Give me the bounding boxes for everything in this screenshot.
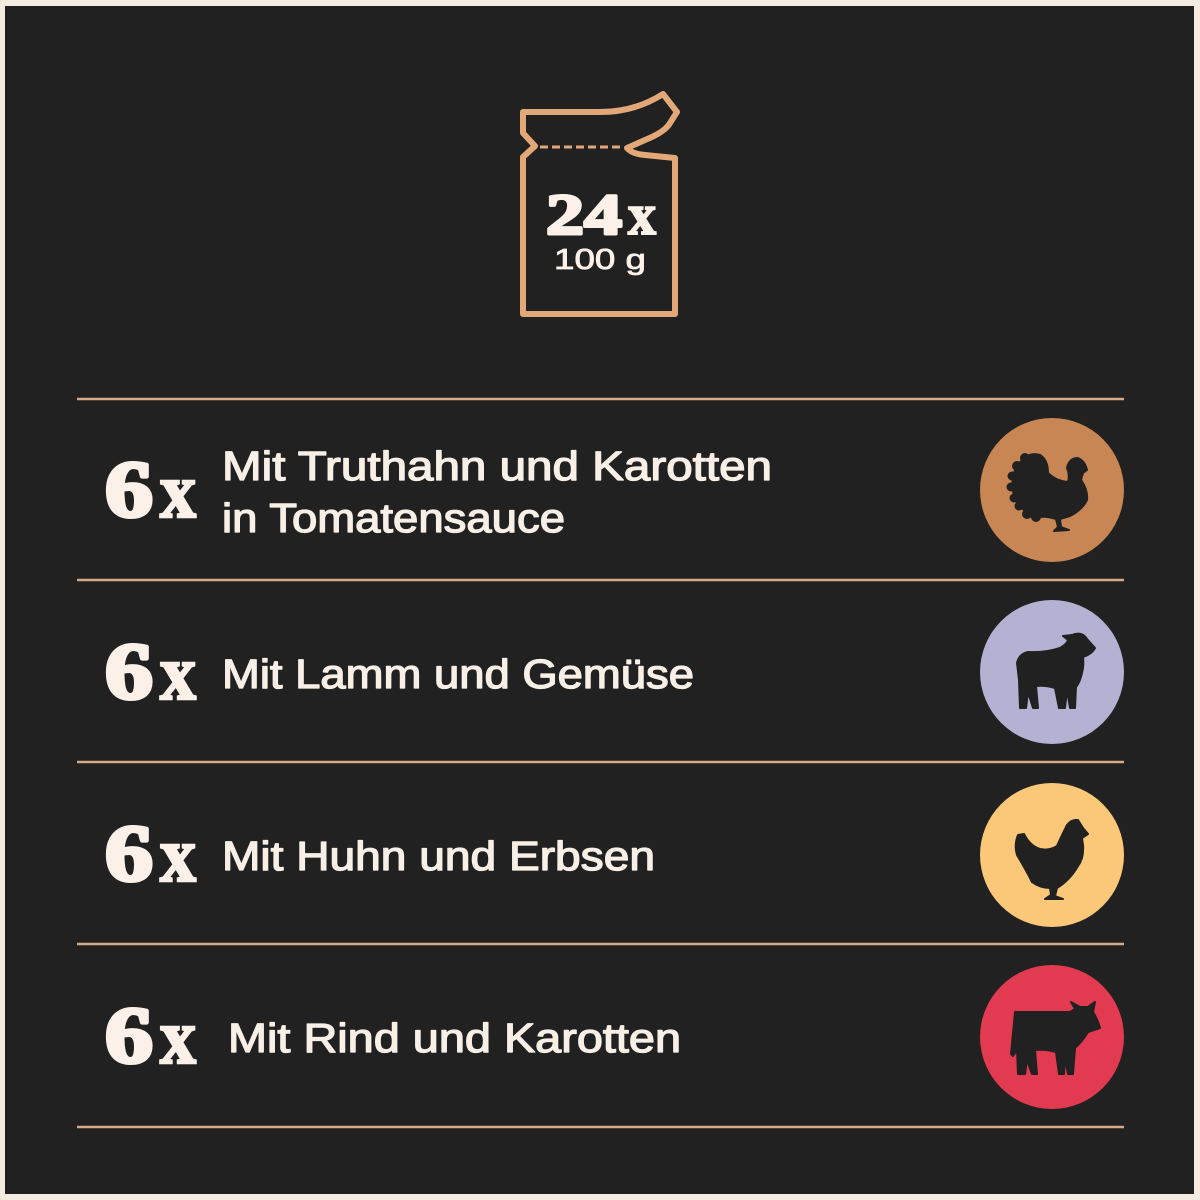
icon: chicken — [980, 783, 1124, 927]
icon: cow — [980, 965, 1124, 1109]
quantity 6x: 6 — [105, 446, 153, 534]
quantity 6x: x — [160, 811, 196, 898]
quantity 6x: 6 — [105, 992, 153, 1080]
icon: pouch 24x 100 g: 24 — [546, 182, 622, 247]
icon: pouch 24x 100 g — [523, 94, 677, 314]
label: Rind: Mit Rind und Karotten — [228, 1015, 681, 1061]
row: Rind — [105, 965, 1124, 1109]
quantity 6x — [105, 628, 196, 716]
icon: pouch 24x 100 g: 100 g — [554, 244, 646, 276]
row: Lamm — [105, 600, 1124, 744]
label: Truthahn: Mit Truthahn und Karotten — [222, 443, 772, 489]
icon: pouch 24x 100 g: x — [628, 182, 656, 247]
label: Huhn: Mit Huhn und Erbsen — [222, 833, 655, 879]
label: Truthahn: in Tomatensauce — [222, 495, 565, 541]
icon: sheep — [980, 600, 1124, 744]
quantity 6x — [105, 992, 196, 1080]
quantity 6x — [105, 810, 196, 898]
row: Truthahn — [105, 418, 1124, 562]
quantity 6x: 6 — [105, 810, 153, 898]
quantity 6x — [105, 446, 196, 534]
label: Lamm: Mit Lamm und Gemüse — [222, 651, 694, 697]
quantity 6x: x — [160, 447, 196, 534]
row: Huhn — [105, 783, 1124, 927]
quantity 6x: x — [160, 993, 196, 1080]
quantity 6x: x — [160, 629, 196, 716]
icon: turkey — [980, 418, 1124, 562]
quantity 6x: 6 — [105, 628, 153, 716]
